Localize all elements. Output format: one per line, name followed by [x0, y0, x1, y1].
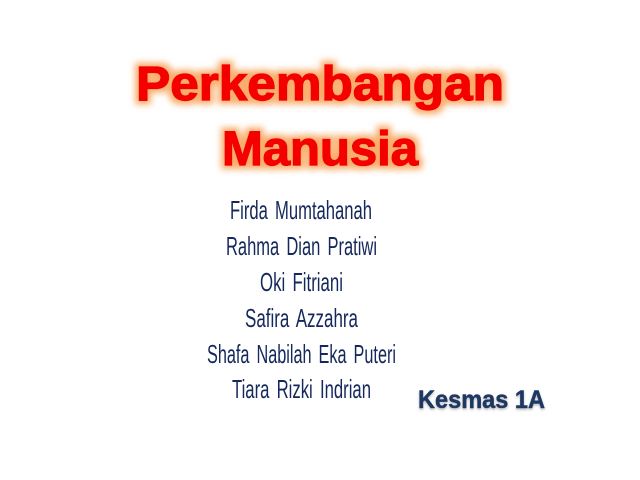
class label: Kesmas 1A	[418, 386, 545, 414]
title	[136, 58, 504, 176]
list of names: Safira Azzahra	[245, 303, 358, 333]
list of names: Rahma Dian Pratiwi	[226, 231, 377, 261]
list of names: Firda Mumtahanah	[230, 195, 372, 225]
list of names: Shafa Nabilah Eka Puteri	[207, 339, 396, 369]
list of names: Oki Fitriani	[260, 267, 343, 297]
title: Perkembangan	[136, 58, 504, 111]
title: Manusia	[222, 123, 418, 176]
list of names	[207, 195, 396, 404]
list of names: Tiara Rizki Indrian	[232, 374, 371, 404]
